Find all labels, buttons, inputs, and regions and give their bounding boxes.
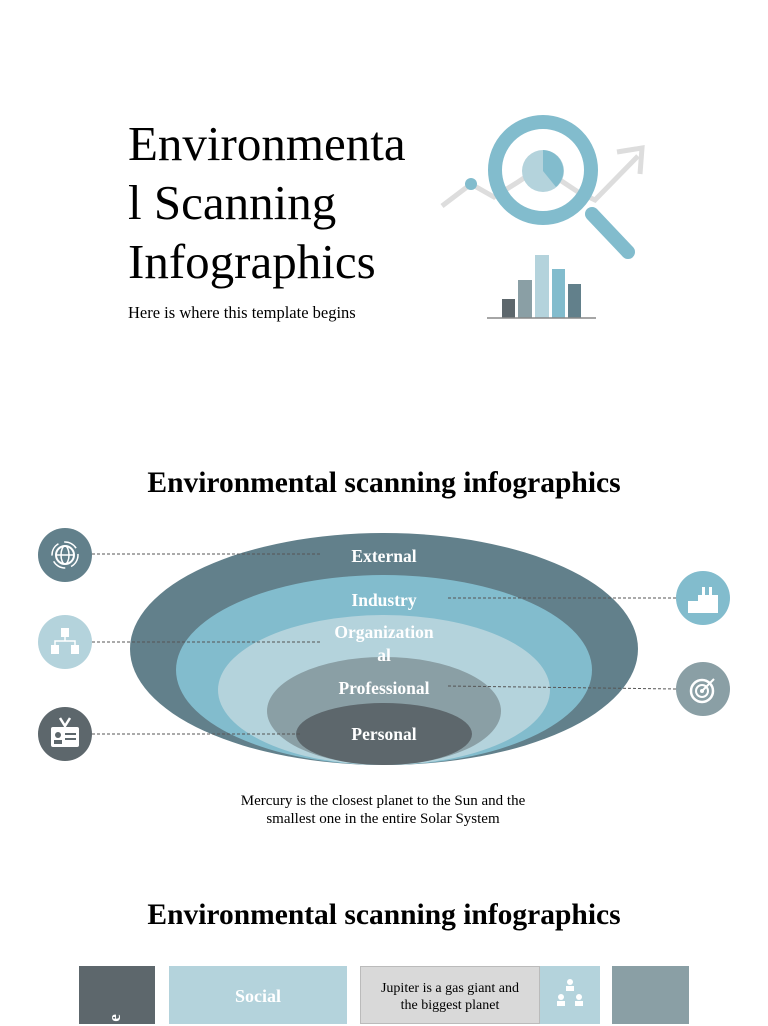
- caption: smallest one in the entire Solar System: [266, 811, 500, 827]
- subtitle: Here is where this template begins: [128, 303, 356, 322]
- box: grey: [612, 966, 689, 1024]
- title: [128, 116, 406, 289]
- icon: id card: [38, 707, 92, 761]
- box: dark: e: [105, 1014, 124, 1022]
- diagram: nested ellipses: Professional: [338, 678, 430, 698]
- icon: factory: [676, 571, 730, 625]
- diagram: nested ellipses: Industry: [351, 590, 417, 610]
- diagram: nested ellipses: External: [351, 546, 417, 566]
- box: icon people: [540, 966, 600, 1024]
- diagram: nested ellipses: al: [377, 645, 391, 665]
- box: social: [169, 966, 347, 1024]
- diagram: nested ellipses: Personal: [351, 724, 417, 744]
- diagram: nested ellipses: Organization: [334, 622, 434, 642]
- caption: [241, 793, 525, 827]
- heading 2: Environmental scanning infographics: [147, 899, 621, 931]
- box: text: the biggest planet: [401, 998, 499, 1013]
- title: Environmenta: [128, 116, 406, 171]
- bottom row boxes: [79, 966, 689, 1024]
- icon: hierarchy: [38, 615, 92, 669]
- box: text: Jupiter is a gas giant and: [381, 981, 519, 996]
- box: text: [360, 966, 540, 1024]
- illustration: magnifier and chart: [440, 115, 645, 319]
- title: Infographics: [128, 234, 376, 289]
- title: l Scanning: [128, 175, 336, 230]
- heading 1: Environmental scanning infographics: [147, 467, 621, 499]
- caption: Mercury is the closest planet to the Sun and the: [241, 793, 525, 809]
- box: social: Social: [235, 986, 281, 1006]
- diagram: nested ellipses: [92, 533, 676, 765]
- icon: target: [676, 662, 730, 716]
- box: dark: [79, 966, 155, 1024]
- icon: globe: [38, 528, 92, 582]
